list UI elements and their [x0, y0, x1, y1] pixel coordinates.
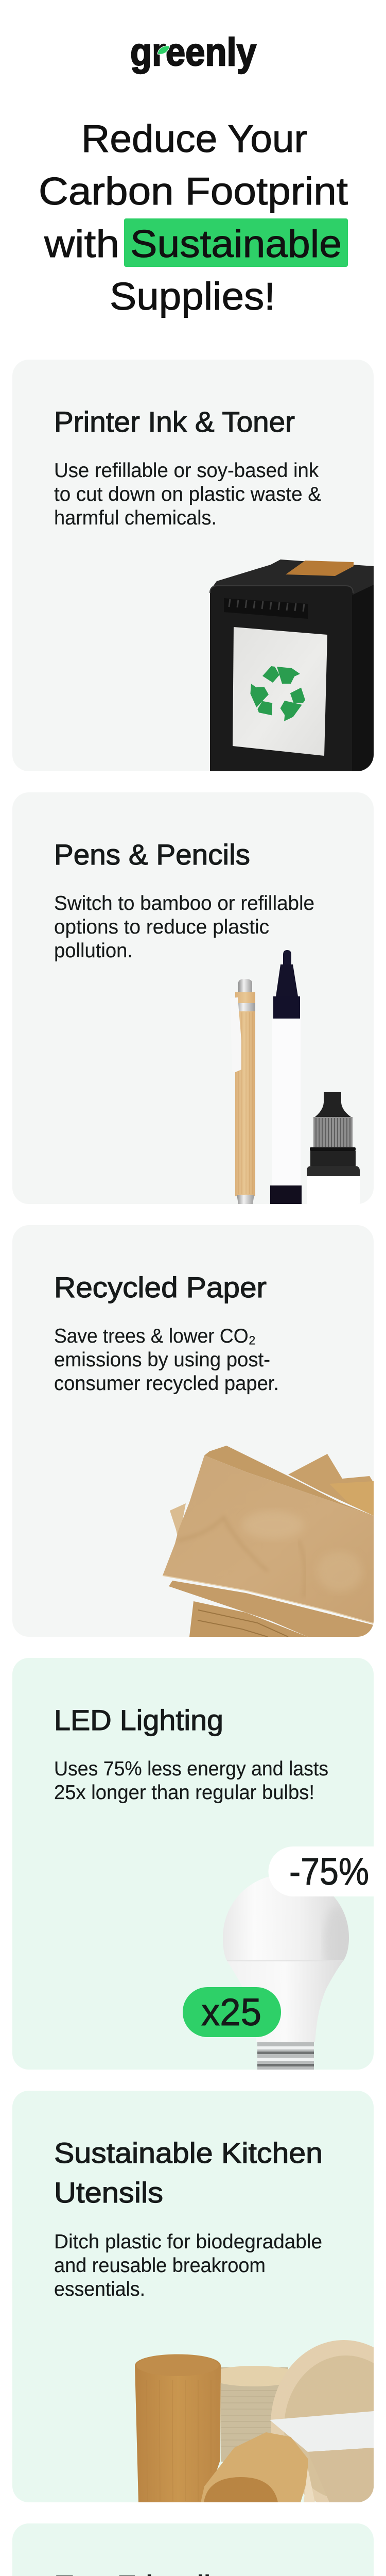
text: pens description: options to reduce plastic: [54, 916, 269, 938]
text: recycled paper description: consumer recycled paper.: [54, 1372, 279, 1395]
image: bamboo pen: [235, 979, 255, 1204]
heading: led lighting: LED Lighting: [54, 1704, 223, 1736]
heading: recycled paper: Recycled Paper: [54, 1271, 267, 1303]
text: recycled paper description: Save trees & lower CO₂: [54, 1325, 256, 1347]
text: kitchen description: [54, 2231, 322, 2300]
heading: printer ink and toner: Printer Ink & Toner: [54, 405, 295, 438]
title: Carbon Footprint: [39, 170, 348, 213]
text: led description: 25x longer than regular bulbs!: [54, 1782, 314, 1804]
image: light bulb: [223, 1874, 350, 2070]
text: led description: Uses 75% less energy and lasts: [54, 1758, 328, 1780]
text: printer ink description: to cut down on plastic waste &: [54, 483, 321, 505]
heading: pens and pencils: Pens & Pencils: [54, 838, 250, 871]
text: kitchen description: Ditch plastic for biodegradable: [54, 2231, 322, 2253]
panel: pens and pencils: [12, 792, 374, 1204]
badge: minus 75 percent: -75%: [289, 1850, 369, 1893]
title: with: [44, 222, 119, 265]
text: recycled paper description: emissions by using post-: [54, 1349, 270, 1371]
image: marker: [270, 950, 302, 1204]
text: kitchen description: essentials.: [54, 2278, 145, 2300]
panel: eco-friendly cleaning supplies: [12, 2523, 374, 2576]
text: printer ink description: Use refillable or soy-based ink: [54, 460, 319, 482]
text: recycled paper description: [54, 1325, 279, 1395]
badge: minus 75 percent: [269, 1846, 374, 1896]
title: Sustainable: [130, 222, 342, 265]
panel: led lighting: [12, 1658, 374, 2070]
panel: printer ink and toner: [12, 360, 374, 771]
panel: recycled paper: [12, 1225, 374, 1637]
text: pens description: Switch to bamboo or refillable: [54, 892, 314, 914]
title: Supplies!: [110, 275, 275, 318]
image: bamboo cups and plates: [135, 2340, 386, 2508]
icon: recycling symbol: [250, 666, 305, 721]
image: ink cartridge: [210, 560, 374, 771]
text: printer ink description: harmful chemicals.: [54, 507, 217, 529]
text: kitchen description: and reusable breakroom: [54, 2255, 266, 2277]
badge: times 25: x25: [201, 1991, 261, 2033]
badge: times 25: [183, 1987, 281, 2037]
logo: greenly: greenly: [130, 30, 256, 74]
panel: sustainable kitchen utensils: [12, 2091, 386, 2508]
heading: sustainable kitchen utensils: [54, 2137, 323, 2209]
image: kraft paper stack: [163, 1446, 374, 1637]
text: pens description: pollution.: [54, 940, 133, 962]
text: printer ink description: [54, 460, 321, 529]
title: [39, 117, 348, 318]
heading: sustainable kitchen utensils: Sustainable Kitchen: [54, 2137, 323, 2169]
text: led description: [54, 1758, 328, 1804]
heading: sustainable kitchen utensils: Utensils: [54, 2176, 163, 2209]
image: dropper bottle: [307, 1092, 360, 1204]
title: Reduce Your: [81, 117, 307, 160]
text: pens description: [54, 892, 314, 962]
